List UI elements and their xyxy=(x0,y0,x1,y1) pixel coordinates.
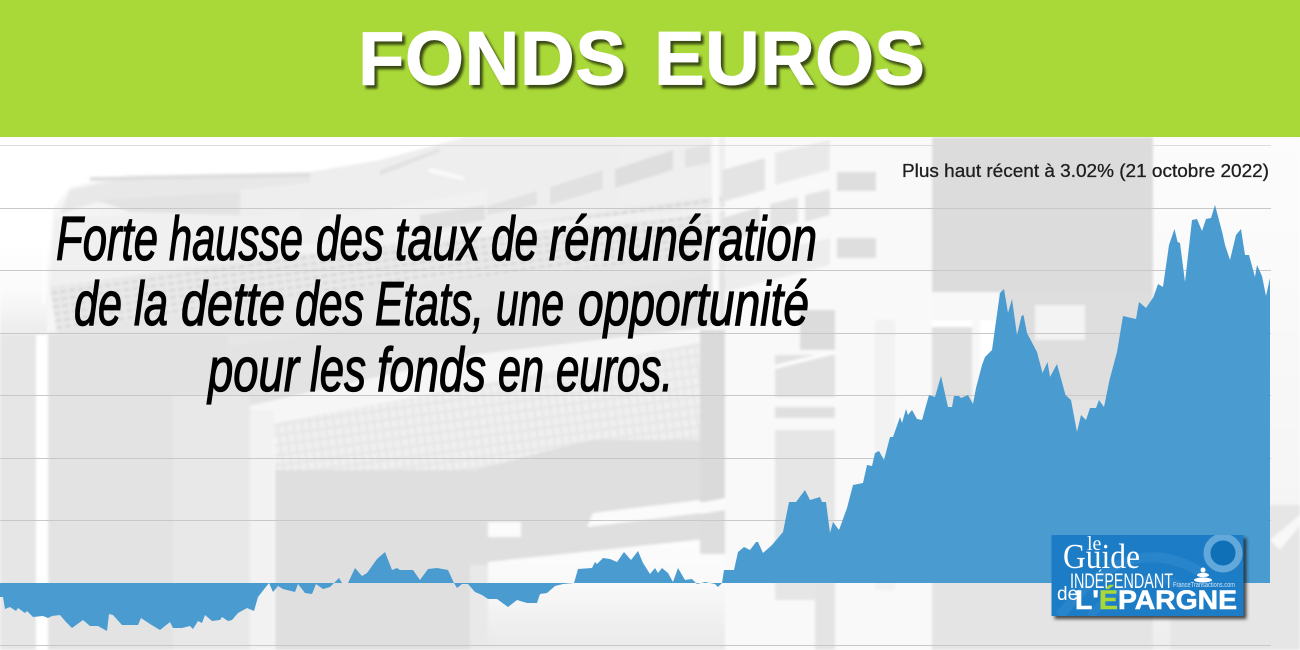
logo small icon xyxy=(1194,568,1212,582)
headline: dette xyxy=(181,270,285,339)
headline xyxy=(56,205,817,405)
headline: taux xyxy=(395,205,481,274)
left forest and columns xyxy=(0,335,36,650)
headline: des xyxy=(295,270,364,339)
façade band with small windows xyxy=(50,194,730,352)
logo wordmark: FranceTransactions.com xyxy=(1173,582,1235,589)
roof struts xyxy=(380,148,440,176)
title: EUROS xyxy=(654,16,925,102)
grid window panel xyxy=(275,338,725,470)
logo: le Guide indépendant de l'épargne xyxy=(1052,533,1244,616)
central white building with balconies xyxy=(725,137,932,650)
headline: Etats, xyxy=(375,270,484,339)
title: FONDS xyxy=(358,16,626,102)
logo wordmark: Guide xyxy=(1063,537,1140,576)
headline: Forte xyxy=(56,205,158,274)
headline: pour xyxy=(207,336,301,405)
headline: de xyxy=(491,205,538,274)
headline: de xyxy=(74,270,122,339)
logo wordmark: INDÉPENDANT xyxy=(1070,570,1173,593)
header band xyxy=(0,0,1300,137)
headline: euros. xyxy=(556,336,673,405)
headline: une xyxy=(496,270,564,339)
headline: la xyxy=(134,270,168,339)
headline: opportunité xyxy=(578,270,809,339)
lower central panel highlights xyxy=(470,565,488,650)
headline: hausse xyxy=(169,205,303,274)
headline: fonds xyxy=(377,336,486,405)
headline: rémunération xyxy=(549,205,817,274)
façade base and rotunda xyxy=(47,137,725,440)
area chart: rate history xyxy=(0,205,1270,631)
logo wordmark: de xyxy=(1057,584,1078,605)
lower dark panel xyxy=(275,440,725,650)
title xyxy=(358,16,925,102)
right fade xyxy=(1153,137,1300,650)
logo wordmark: L'ÉPARGNE xyxy=(1075,584,1237,615)
dark tower xyxy=(932,137,1153,292)
headline: des xyxy=(316,205,384,274)
background: grey building photograph xyxy=(0,137,1300,650)
annotation: recent high: Plus haut récent à 3.02% (21 octobre 2022) xyxy=(902,160,1269,181)
upper windows row xyxy=(487,191,537,215)
headline: les xyxy=(310,336,366,405)
logo decorative ring xyxy=(1060,537,1239,616)
logo wordmark: le xyxy=(1087,533,1102,555)
headline: en xyxy=(498,336,544,405)
logo wordmark xyxy=(1057,533,1237,615)
grid lines xyxy=(0,146,1271,646)
